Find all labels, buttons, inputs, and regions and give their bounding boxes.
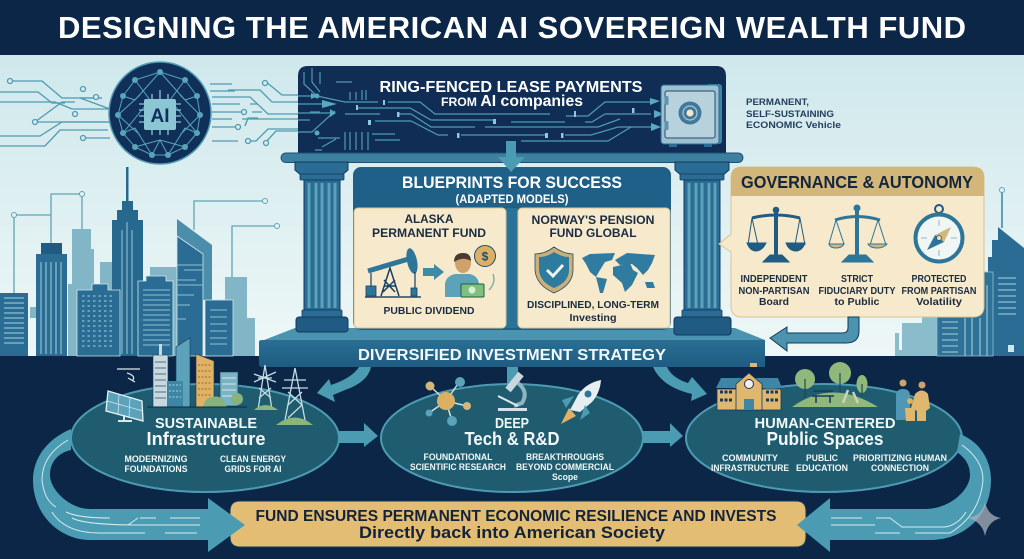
ellipse: sustainable infrastructure: CLEAN ENERGY bbox=[220, 454, 286, 464]
panel: governance and autonomy: PROTECTED bbox=[912, 274, 966, 285]
arrow: left return loop bbox=[33, 429, 245, 552]
icon: oil pump bbox=[365, 247, 421, 297]
circuit lines from AI to panel bbox=[0, 78, 298, 146]
ellipse: human-centered public spaces: COMMUNITY bbox=[722, 453, 778, 463]
icon: park bbox=[792, 362, 878, 407]
ellipse: human-centered public spaces: PRIORITIZING HUMAN bbox=[853, 453, 947, 463]
panel: governance and autonomy: FIDUCIARY DUTY bbox=[818, 286, 896, 297]
ellipse: sustainable infrastructure bbox=[71, 338, 339, 492]
icon: vault safe bbox=[661, 84, 722, 147]
icon: school bbox=[716, 363, 782, 410]
panel: governance and autonomy bbox=[719, 167, 984, 317]
icon: solar panel bbox=[106, 369, 143, 421]
card: Norway's Pension Fund Global: Investing bbox=[570, 312, 616, 324]
banner: fund ensures resilience: Directly back into American Society bbox=[359, 523, 666, 542]
band: diversified investment strategy: DIVERSIFIED INVESTMENT STRATEGY bbox=[358, 347, 667, 364]
ellipse: sustainable infrastructure: MODERNIZING bbox=[124, 454, 188, 464]
ellipse: deep tech: Scope bbox=[552, 472, 578, 482]
left column bbox=[295, 162, 348, 332]
card: Alaska Permanent Fund bbox=[354, 208, 506, 328]
ellipse: sustainable infrastructure: FOUNDATIONS bbox=[124, 464, 188, 474]
ellipse: deep tech: BEYOND COMMERCIAL bbox=[516, 462, 614, 472]
panel: governance and autonomy: STRICT bbox=[841, 274, 873, 285]
panel: governance and autonomy: Volatility bbox=[916, 297, 962, 308]
text: permanent vehicle: PERMANENT, bbox=[746, 97, 809, 108]
down arrow into blueprints bbox=[498, 141, 525, 172]
icon: microscope bbox=[498, 374, 527, 411]
ellipse: sustainable infrastructure: SUSTAINABLE bbox=[155, 415, 257, 432]
heading: blueprints: BLUEPRINTS FOR SUCCESS bbox=[402, 173, 622, 192]
band: diversified investment strategy bbox=[259, 340, 765, 367]
title bar: DESIGNING THE AMERICAN AI SOVEREIGN WEALTH FUND bbox=[58, 10, 966, 45]
icon: sparkle watermark bbox=[967, 502, 1001, 536]
panel: governance and autonomy: to Public bbox=[834, 297, 880, 308]
ellipse: human-centered public spaces: INFRASTRUCTURE bbox=[711, 463, 789, 473]
panel: governance and autonomy: GOVERNANCE & AUTONOMY bbox=[741, 172, 973, 192]
ellipse: human-centered public spaces: HUMAN-CENTERED bbox=[754, 415, 896, 432]
arrow: deep tech to public spaces bbox=[642, 423, 683, 447]
ellipse: human-centered public spaces: Public Spaces bbox=[766, 429, 884, 449]
panel: lease payments: FROM AI companies bbox=[441, 93, 583, 110]
icon: pylon two bbox=[276, 368, 313, 425]
ellipse: human-centered public spaces bbox=[686, 362, 962, 492]
banner: fund ensures resilience: FUND ENSURES PERMANENT ECONOMIC RESILIENCE AND INVESTS bbox=[256, 508, 776, 525]
text: permanent vehicle: ECONOMIC Vehicle bbox=[746, 120, 841, 131]
card: Norway's Pension Fund Global: FUND GLOBAL bbox=[550, 226, 636, 240]
card: Alaska Permanent Fund: PUBLIC DIVIDEND bbox=[384, 305, 475, 317]
panel: blueprints for success bbox=[353, 167, 671, 330]
left city skyline bbox=[0, 167, 280, 356]
arrow: strategy to public spaces bbox=[653, 367, 707, 401]
pedestal step bbox=[259, 328, 765, 342]
icon: family bbox=[896, 380, 930, 421]
card: Norway's Pension Fund Global bbox=[518, 208, 670, 328]
heading: blueprints: (ADAPTED MODELS) bbox=[456, 192, 568, 206]
ellipse: deep tech: FOUNDATIONAL bbox=[424, 452, 493, 462]
panel: governance and autonomy: Board bbox=[759, 297, 789, 308]
ellipse: human-centered public spaces: EDUCATION bbox=[796, 463, 848, 473]
icon: AI network circle bbox=[109, 62, 211, 164]
icon: balance scale bbox=[747, 207, 805, 262]
ellipse: sustainable infrastructure: Infrastructure bbox=[146, 429, 266, 449]
ellipse: sustainable infrastructure: GRIDS FOR AI bbox=[224, 464, 282, 474]
icon: person with dividend: $ bbox=[482, 250, 489, 264]
banner: fund ensures resilience bbox=[230, 501, 806, 547]
icon: arrow to person bbox=[423, 264, 444, 280]
panel: lease payments: RING-FENCED LEASE PAYMENTS bbox=[380, 79, 643, 96]
right city skyline bbox=[895, 188, 1024, 356]
icon: molecule bbox=[426, 377, 471, 426]
ellipse: deep tech: SCIENTIFIC RESEARCH bbox=[410, 462, 506, 472]
ellipse: human-centered public spaces: CONNECTION bbox=[871, 463, 929, 473]
ellipse: deep tech: Tech & R&D bbox=[464, 429, 560, 449]
icon: AI network circle: AI bbox=[150, 106, 170, 127]
heading: blueprints bbox=[402, 173, 622, 206]
card: Norway's Pension Fund Global: NORWAY'S PENSION bbox=[532, 213, 654, 227]
text: permanent vehicle: SELF-SUSTAINING bbox=[746, 109, 834, 120]
ellipse: deep tech bbox=[381, 374, 643, 492]
text: permanent vehicle bbox=[746, 97, 841, 131]
ellipse: deep tech: BREAKTHROUGHS bbox=[526, 452, 604, 462]
panel: governance and autonomy: NON-PARTISAN bbox=[738, 286, 810, 297]
card: Alaska Permanent Fund: PERMANENT FUND bbox=[372, 226, 486, 240]
icon: compass bbox=[916, 205, 962, 262]
right column bbox=[674, 162, 731, 335]
panel: lease payments bbox=[298, 66, 726, 155]
icon: rocket bbox=[561, 380, 601, 424]
icon: fiduciary scale bbox=[829, 205, 887, 262]
icon: city cluster bbox=[147, 338, 247, 407]
panel: governance and autonomy: INDEPENDENT bbox=[740, 274, 808, 285]
icon: pylon one bbox=[254, 365, 278, 410]
icon: person with dividend bbox=[445, 246, 496, 297]
arrow: right return loop bbox=[797, 434, 991, 552]
icon: shield bbox=[535, 247, 573, 293]
sky background bbox=[0, 54, 1024, 356]
arrow: governance to investment strategy bbox=[770, 317, 859, 351]
dark lower background bbox=[0, 356, 1024, 559]
stub: strategy to deep tech bbox=[507, 367, 518, 384]
ellipse: deep tech: DEEP bbox=[495, 415, 529, 432]
icon: world map bbox=[582, 253, 655, 293]
arrow: strategy to infrastructure bbox=[317, 367, 371, 402]
entablature beam bbox=[281, 153, 743, 162]
card: Norway's Pension Fund Global: DISCIPLINED, LONG-TERM bbox=[527, 299, 659, 311]
ellipse: human-centered public spaces: PUBLIC bbox=[806, 453, 838, 463]
panel: governance and autonomy: FROM PARTISAN bbox=[902, 286, 976, 297]
arrow: infrastructure to deep tech bbox=[339, 423, 378, 447]
title bar bbox=[0, 0, 1024, 55]
card: Alaska Permanent Fund: ALASKA bbox=[404, 212, 454, 226]
